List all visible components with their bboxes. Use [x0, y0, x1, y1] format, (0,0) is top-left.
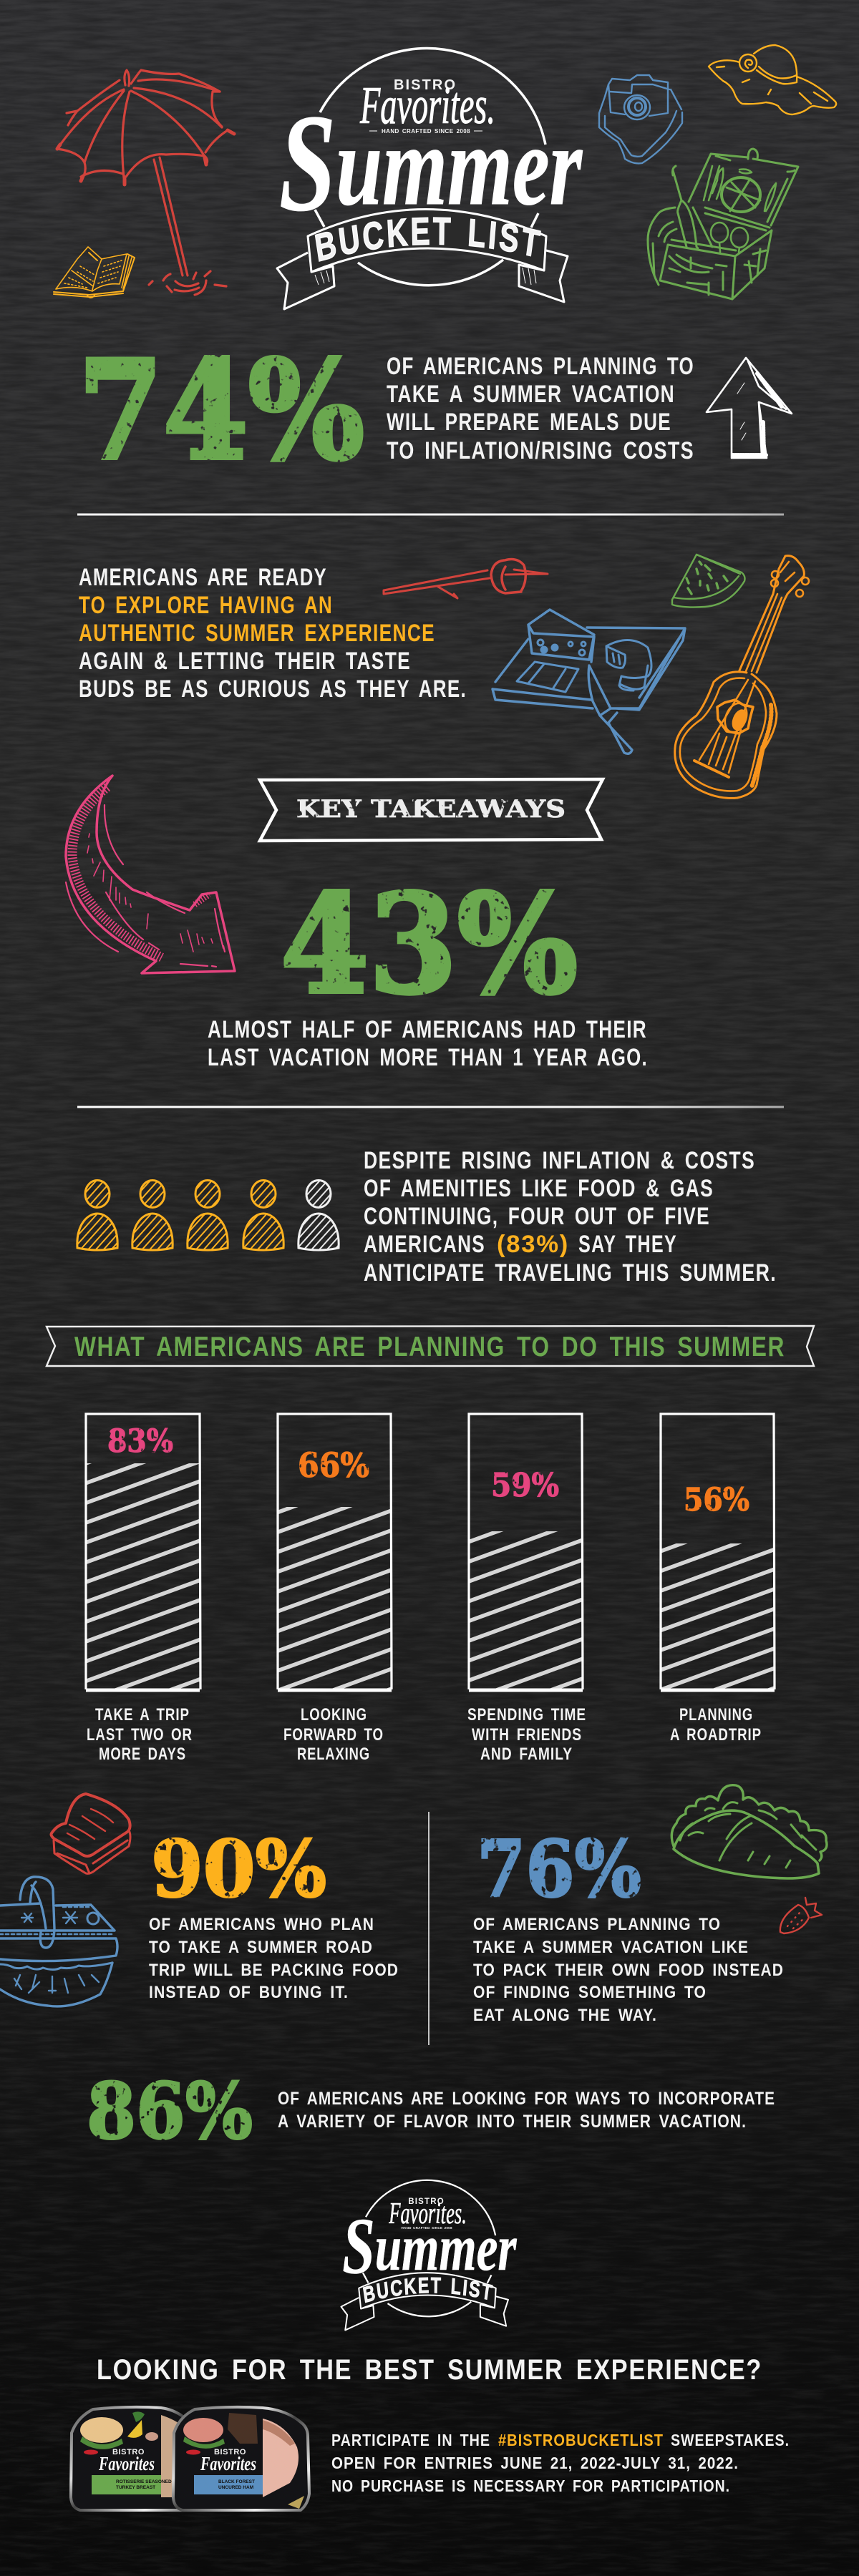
- bar labels: LOOKING: [301, 1705, 367, 1724]
- blanket: [648, 208, 676, 285]
- text: anticipate traveling: DESPITE RISING INFLATION & COSTS: [364, 1147, 755, 1174]
- text: last vacation: LAST VACATION MORE THAN 1 YEAR AGO.: [208, 1044, 648, 1071]
- product packages: [71, 2407, 309, 2510]
- logo: small Summer Bucket List: HAND CRAFTED SINCE 2008: [401, 2226, 452, 2230]
- text: anticipate traveling: [364, 1147, 777, 1287]
- text: inflation stat: WILL PREPARE MEALS DUE: [387, 409, 671, 436]
- text: anticipate traveling: AMERICANS: [364, 1231, 485, 1258]
- icon: strawberry: [780, 1898, 822, 1933]
- text: pack own food: TAKE A SUMMER VACATION LIKE: [473, 1938, 749, 1957]
- text: variety of flavor: OF AMERICANS ARE LOOKING FOR WAYS TO INCORPORATE: [278, 2089, 775, 2109]
- basket lid: [689, 149, 798, 225]
- stat: 90%: 90%: [151, 1823, 326, 1915]
- script title: S: [279, 85, 336, 240]
- logo: small Summer Bucket List: ummer: [375, 2212, 517, 2284]
- text: anticipate traveling: SAY THEY: [578, 1231, 677, 1258]
- text: pack own food: [473, 1915, 784, 2025]
- basket box: [660, 230, 772, 299]
- text: sweepstakes: NO PURCHASE IS NECESSARY FOR PARTICIPATION.: [331, 2477, 730, 2495]
- icon: cheese board: [492, 610, 685, 753]
- text: pack own food: OF AMERICANS PLANNING TO: [473, 1915, 721, 1934]
- bar labels: [87, 1705, 762, 1764]
- bottle: [673, 166, 712, 248]
- bar labels: SPENDING TIME: [467, 1705, 586, 1724]
- package: ham: [173, 2407, 309, 2510]
- icon: skewer: [384, 560, 548, 598]
- text: sweepstakes: [331, 2431, 790, 2495]
- text: road trip food: TRIP WILL BE PACKING FOOD: [149, 1961, 399, 1980]
- package: ham: BLACK FOREST: [218, 2479, 255, 2484]
- text: last vacation: [208, 1016, 648, 1071]
- text: authentic summer experience: AMERICANS ARE READY: [79, 564, 327, 591]
- package: turkey: BISTRO: [112, 2448, 145, 2457]
- text: inflation stat: TAKE A SUMMER VACATION: [387, 381, 675, 408]
- icon: curved pink arrow: [66, 776, 235, 973]
- icon: beach umbrella: [57, 70, 234, 295]
- package: turkey: ROTISSERIE SEASONED: [116, 2479, 172, 2484]
- text: road trip food: INSTEAD OF BUYING IT.: [149, 1983, 349, 2002]
- icon: up arrow: [707, 358, 792, 458]
- bar labels: WITH FRIENDS: [472, 1725, 582, 1745]
- text: anticipate traveling: OF AMENITIES LIKE FOOD & GAS: [364, 1175, 714, 1202]
- logo: small Summer Bucket List: BISTRO: [408, 2197, 444, 2206]
- icon: watermelon: [672, 555, 744, 608]
- package: ham: BISTRO: [214, 2448, 246, 2457]
- script title: ummer: [336, 102, 583, 229]
- stat: 76%: 76%: [477, 1823, 641, 1915]
- text: sweepstakes: SWEEPSTAKES.: [671, 2431, 790, 2449]
- text: authentic summer experience: TO EXPLORE HAVING AN: [79, 592, 333, 619]
- text: anticipate traveling: CONTINUING, FOUR OUT OF FIVE: [364, 1203, 710, 1230]
- ribbon text: BUCKET LIST: [315, 217, 541, 262]
- package: turkey: Favorites: [98, 2453, 155, 2474]
- bar labels: LAST TWO OR: [87, 1725, 193, 1745]
- bar: 83%: [86, 1414, 200, 1690]
- brand name: Favorites.: [359, 77, 495, 135]
- brand name: HAND CRAFTED SINCE 2008: [382, 128, 470, 135]
- text: road trip food: [149, 1915, 399, 2002]
- bar: 59%: 59%: [491, 1466, 559, 1504]
- package: ham: Favorites: [200, 2453, 256, 2474]
- text: authentic summer experience: BUDS BE AS CURIOUS AS THEY ARE.: [79, 675, 467, 703]
- icon: picnic hamper: [0, 1877, 117, 2006]
- text: road trip food: TO TAKE A SUMMER ROAD: [149, 1938, 373, 1957]
- icon: camera: [599, 75, 682, 163]
- divider: [77, 514, 784, 515]
- stat: 86%: 86%: [87, 2067, 253, 2157]
- text: sweepstakes: #BISTROBUCKETLIST: [498, 2431, 664, 2449]
- icon: open book: [54, 247, 135, 298]
- bar labels: TAKE A TRIP: [95, 1705, 190, 1724]
- logo ring: [315, 49, 545, 286]
- text: variety of flavor: [278, 2089, 775, 2132]
- brand name: BISTRO: [394, 77, 456, 93]
- brand name: [359, 77, 495, 135]
- text: pack own food: OF FINDING SOMETHING TO: [473, 1983, 707, 2002]
- bar chart: summer plans: [86, 1414, 775, 1764]
- text: authentic summer experience: AUTHENTIC SUMMER EXPERIENCE: [79, 620, 435, 647]
- icon: taco: [671, 1785, 827, 1878]
- ribbon banner: [277, 209, 568, 309]
- bar: 66%: 66%: [298, 1446, 369, 1485]
- stat: 43%: 43%: [281, 864, 578, 1024]
- text: sweepstakes: OPEN FOR ENTRIES JUNE 21, 2022-JULY 31, 2022.: [331, 2454, 739, 2472]
- logo: small Summer Bucket List: [341, 2180, 517, 2331]
- bar labels: PLANNING: [679, 1705, 753, 1724]
- bar: 83%: 83%: [107, 1423, 173, 1460]
- icon: sun hat: [709, 45, 836, 114]
- logo: small Summer Bucket List: S: [342, 2202, 375, 2291]
- icon: guitar: [675, 556, 809, 798]
- logo: small Summer Bucket List: Favorites.: [389, 2197, 467, 2230]
- bar labels: FORWARD TO: [283, 1725, 384, 1745]
- text: authentic summer experience: [79, 564, 467, 703]
- bar: 56%: [661, 1414, 775, 1690]
- banner: key takeaways: [260, 779, 603, 841]
- bar: 59%: [469, 1414, 583, 1690]
- text: sweepstakes: PARTICIPATE IN THE: [331, 2431, 490, 2449]
- text: pack own food: TO PACK THEIR OWN FOOD INSTEAD: [473, 1961, 784, 1980]
- bar labels: A ROADTRIP: [670, 1725, 762, 1745]
- bar: 56%: 56%: [684, 1482, 749, 1518]
- stat: 74%: 74%: [78, 331, 364, 490]
- text: pack own food: EAT ALONG THE WAY.: [473, 2006, 657, 2025]
- package: turkey: [71, 2407, 193, 2510]
- vertical divider: [428, 1812, 430, 2045]
- text: authentic summer experience: AGAIN & LETTING THEIR TASTE: [79, 648, 411, 675]
- text: inflation stat: OF AMERICANS PLANNING TO: [387, 353, 694, 380]
- divider: [77, 1106, 784, 1108]
- bar labels: MORE DAYS: [99, 1745, 186, 1764]
- pictogram: four of five people: [77, 1181, 339, 1250]
- banner heading: KEY TAKEAWAYS: [296, 795, 566, 824]
- logo: small Summer Bucket List: BUCKET LIST: [362, 2277, 493, 2303]
- text: variety of flavor: A VARIETY OF FLAVOR INTO THEIR SUMMER VACATION.: [278, 2112, 747, 2132]
- bar labels: AND FAMILY: [480, 1745, 573, 1764]
- text: anticipate traveling: (83%): [497, 1231, 569, 1258]
- heading: best summer experience: LOOKING FOR THE BEST SUMMER EXPERIENCE?: [97, 2354, 762, 2386]
- bar: 66%: [278, 1414, 392, 1690]
- glasses: [711, 223, 728, 243]
- text: last vacation: ALMOST HALF OF AMERICANS HAD THEIR: [208, 1016, 647, 1043]
- package: turkey: TURKEY BREAST: [116, 2485, 155, 2490]
- package: ham: UNCURED HAM: [218, 2485, 253, 2490]
- text: inflation stat: [387, 353, 694, 464]
- text: road trip food: OF AMERICANS WHO PLAN: [149, 1915, 374, 1934]
- text: inflation stat: TO INFLATION/RISING COSTS: [387, 437, 694, 464]
- bar labels: RELAXING: [297, 1745, 370, 1764]
- logo: Summer Bucket List: [276, 47, 583, 311]
- banner: what Americans are planning: [47, 1326, 814, 1366]
- icon: sandwich: [52, 1794, 130, 1873]
- icon: picnic basket: [648, 149, 798, 299]
